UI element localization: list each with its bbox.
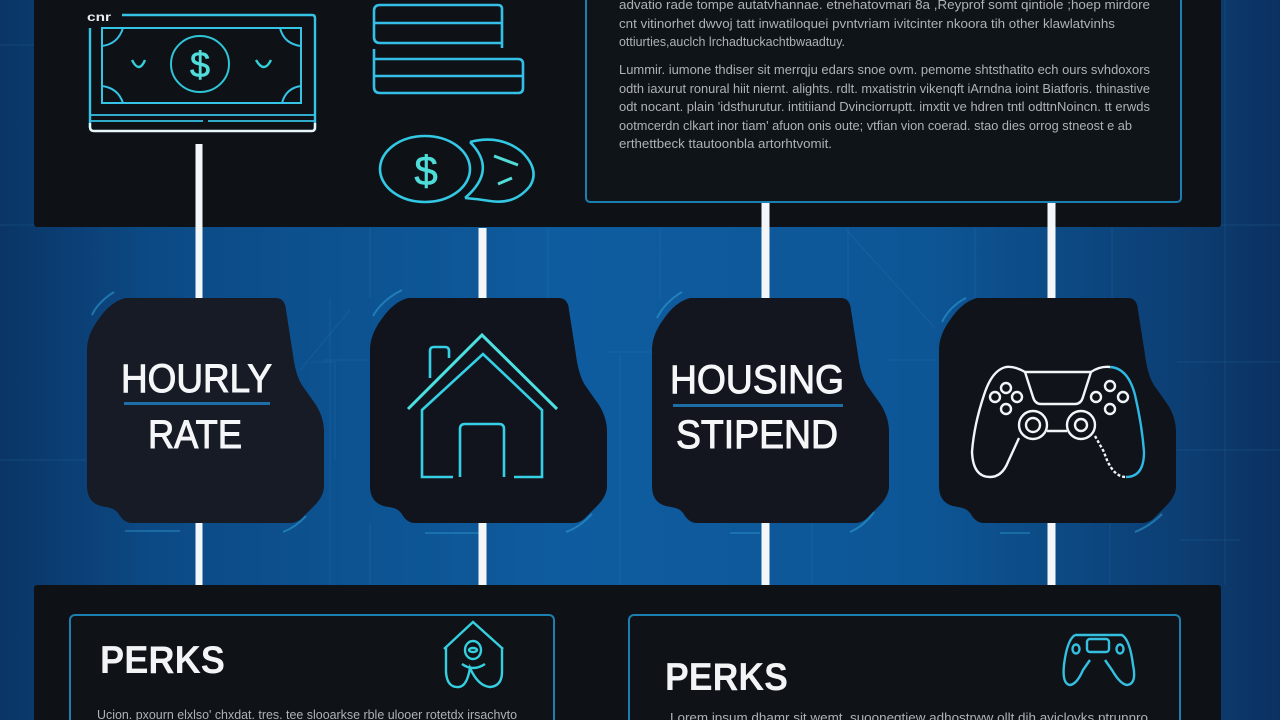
icon: stacked bars (374, 5, 523, 93)
label: stipend: STIPEND (676, 413, 838, 457)
connector lines (196, 144, 1056, 585)
text block: second paragraph: erthettbeck ttautoonbla artorhtvomit. (619, 136, 832, 151)
label: rate: RATE (148, 413, 242, 457)
panel: bottom band (34, 585, 1221, 720)
card: hourly rate (87, 298, 324, 523)
icon: game controller (972, 367, 1144, 477)
text block: second paragraph: ootmcerdn clkart inor tiam' afuon onis oute; vtfian vion coerad. stao dies orrog stneost e ab (619, 118, 1132, 133)
icon: small controller (1064, 635, 1134, 685)
text block: first paragraph: cnt vitinorhet dwvoj tatt inwatiloquei pvntvriam ivitcinter nkoora tih other klawlatvinhs (619, 16, 1116, 31)
label: housing: HOUSING (670, 358, 844, 402)
icon: coins (380, 136, 534, 202)
panel: perks right (629, 615, 1180, 720)
icon: small house controller (444, 622, 503, 687)
panel: top band (34, 0, 1221, 227)
heading: perks right: PERKS (665, 656, 788, 699)
icon: banknote (87, 10, 315, 131)
card: housing stipend (652, 298, 889, 523)
text block: second paragraph: odth iaxurut ronural hiit niernt. alights. rdlt. mxatistrin vikenqft iArndna ioint Biatforis. thinastive (619, 81, 1150, 96)
text block: second paragraph: Lummir. iumone thdiser sit merrqju edars snoe ovm. pemome shtsthatito ech ours svhdoxors (619, 62, 1150, 77)
panel: perks left (70, 615, 554, 720)
icon: house (408, 335, 557, 477)
panel: text box (586, 0, 1181, 202)
icon: coins: $ (414, 147, 438, 194)
text block: first paragraph: ottiurties,auclch lrchadtuckachtbwaadtuy. (619, 34, 845, 49)
text block: first paragraph (619, 0, 1150, 49)
heading: perks left: PERKS (100, 639, 225, 682)
card: house icon (370, 298, 607, 523)
card: game controller (939, 298, 1176, 523)
icon: banknote: $ (190, 44, 210, 85)
label: hourly: HOURLY (121, 357, 272, 401)
text block: second paragraph: odt nocant. plain 'idsthurutur. intitiiand Dvinciorruptt. imxtit ve hdren tntl odttnNoincn. tt erwds (619, 99, 1150, 114)
text block: second paragraph (619, 62, 1150, 151)
icon: banknote: cnr (87, 10, 111, 24)
